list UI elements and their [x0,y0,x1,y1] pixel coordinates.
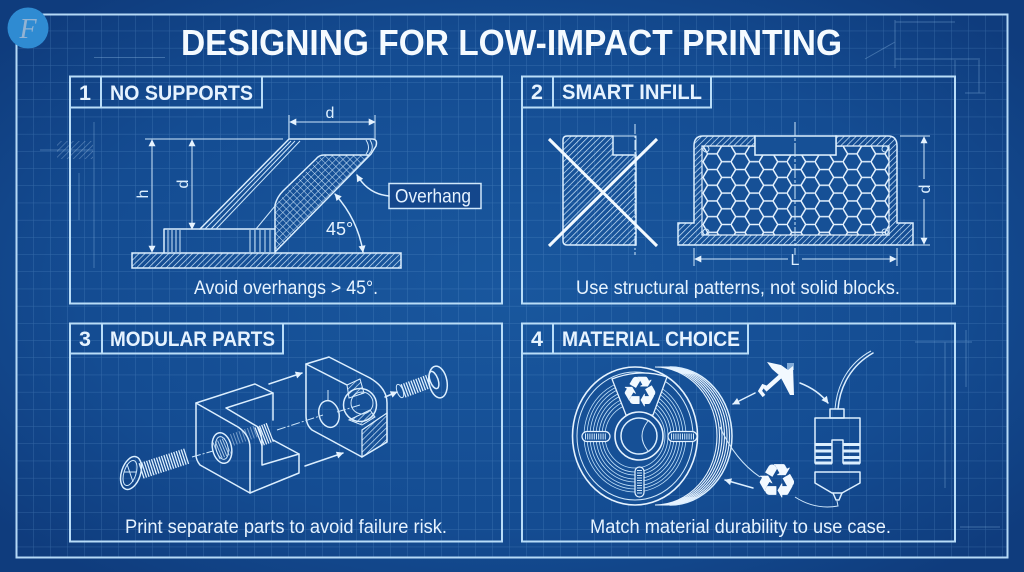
header: no supports: 1 [79,81,91,105]
header: modular parts: 3 [79,327,91,351]
header: smart infill: SMART INFILL [562,80,702,104]
header: smart infill: 2 [531,80,543,104]
header: material choice: MATERIAL CHOICE [562,327,740,351]
dimensions: d and L: L [791,252,800,269]
caption: Print separate parts to avoid failure risk. [125,517,447,538]
caption: Avoid overhangs > 45°. [194,278,378,299]
icon: recycle symbol: ♻ [756,454,798,508]
dimensions: h and d: d [326,105,334,122]
callout: overhang [357,175,481,208]
panel: smart infill [522,76,955,304]
icon: left screw [117,454,187,492]
dimensions: d and L: d [917,185,934,193]
icon: print head [815,351,873,500]
icon: right screw [395,365,450,399]
dimensions: h and d [135,105,375,252]
header: smart infill [522,76,711,108]
header: material choice [522,324,748,354]
diagram: crossed solid block [549,124,657,255]
icon: filament spool [572,367,732,505]
caption: Match material durability to use case. [590,517,891,538]
caption: Use structural patterns, not solid blocks. [576,278,900,299]
panel: modular parts [70,324,502,542]
header: material choice: 4 [531,327,543,351]
panel: no supports [70,76,502,304]
logo badge [8,8,48,48]
header: modular parts: MODULAR PARTS [110,327,275,351]
header: no supports [70,76,262,108]
header: modular parts [70,324,283,354]
angle: 45 degrees: 45° [326,219,353,239]
logo badge: F [18,14,37,45]
header: no supports: NO SUPPORTS [110,81,253,105]
diagram: overhang part [132,139,401,268]
arrows: assembly direction [192,373,397,466]
arrows: material cycle [720,383,838,507]
icon: wrench and hammer tools [760,362,794,396]
panel: material choice [522,324,955,542]
diagram: right block [306,357,387,457]
title: DESIGNING FOR LOW-IMPACT PRINTING [181,22,842,63]
diagram: left block [196,384,299,493]
diagram: honeycomb infill part [678,122,913,255]
dimensions: h and d: h [135,190,152,198]
icon: recycle on spool: ♻ [622,368,658,416]
dimensions: d and L [694,136,934,269]
dimensions: h and d: d [175,180,192,188]
angle: 45 degrees [326,194,363,252]
callout: overhang: Overhang [395,186,471,208]
